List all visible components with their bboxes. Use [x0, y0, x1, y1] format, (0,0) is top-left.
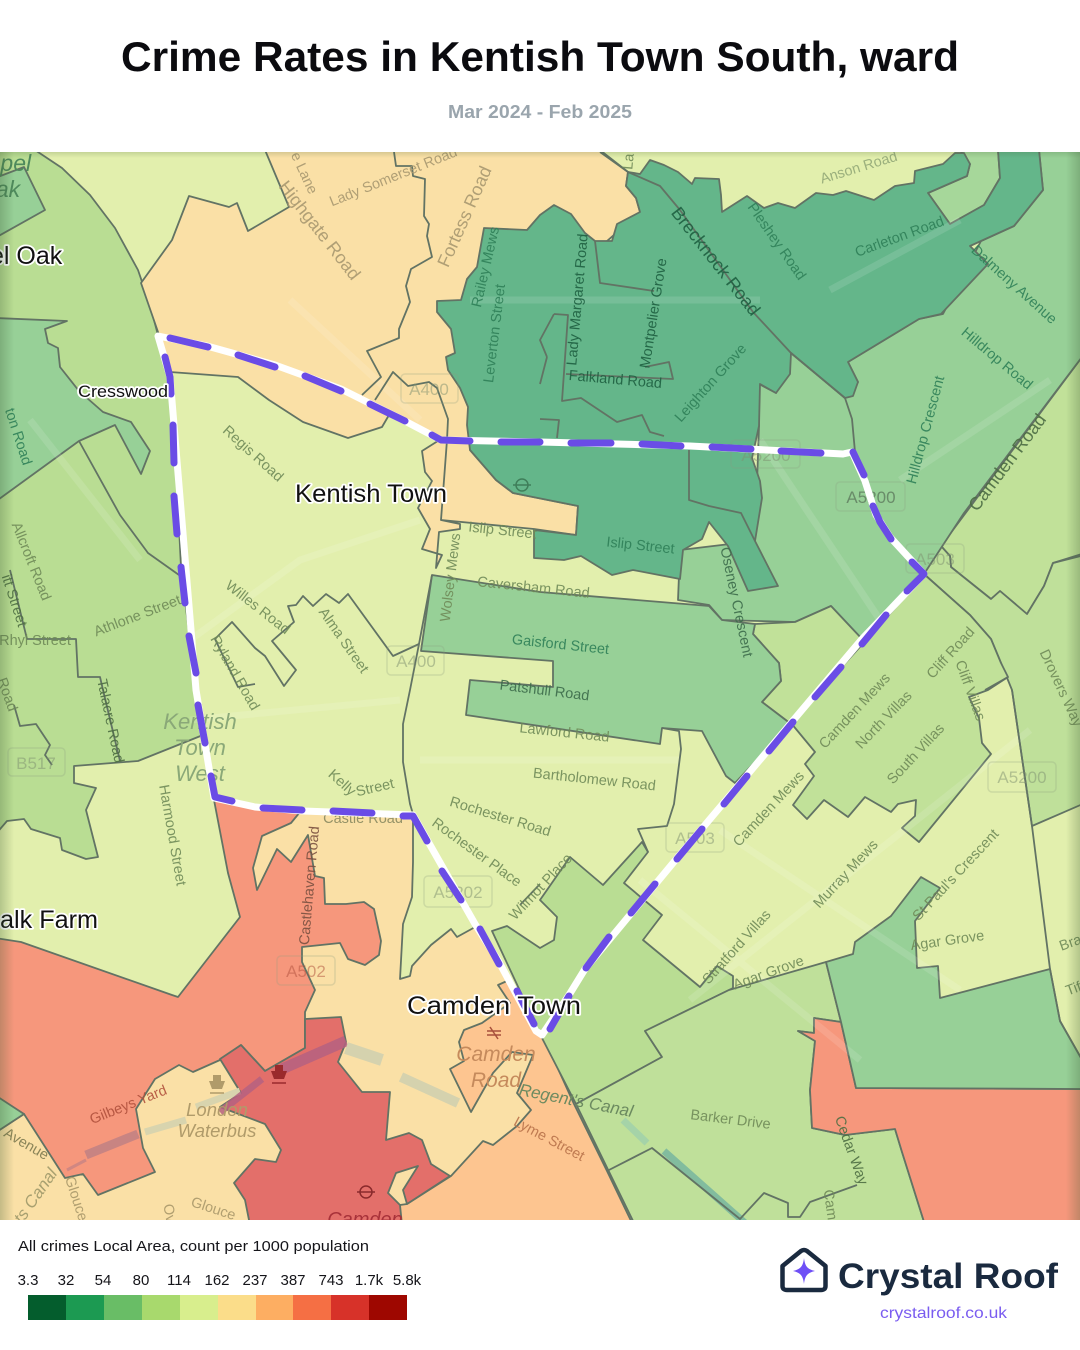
road labels: Rochester Place — [429, 815, 524, 891]
road labels: Talacre Road — [93, 678, 127, 765]
road labels: Oseney Crescent — [716, 546, 755, 659]
map place labels: alk Farm — [0, 906, 98, 934]
road labels: Fortess Road — [433, 163, 496, 270]
road shields: A5200 — [997, 768, 1047, 787]
road labels: Lady Somerset Road — [327, 144, 460, 210]
road labels: Lawford Road — [519, 720, 610, 746]
area: Camden Town red — [220, 1017, 450, 1225]
road shields: A502 — [286, 962, 326, 981]
road labels: Agar Grove — [910, 928, 985, 954]
road labels: Alma Street — [315, 605, 372, 676]
legend values: 237 — [242, 1272, 268, 1289]
faint road network — [30, 220, 1050, 1060]
road shields: A5202 — [433, 883, 483, 902]
area: small west green — [0, 1095, 24, 1133]
legend values: 54 — [95, 1272, 111, 1289]
boundary lines — [10, 152, 1080, 1219]
road shields: A503 — [675, 829, 715, 848]
map place labels — [0, 242, 581, 1020]
road labels: Caversham Road — [476, 574, 590, 602]
italic place labels: West — [175, 761, 226, 786]
road labels: Lyme Street — [511, 1114, 587, 1165]
area: top-left green patch — [0, 167, 45, 238]
road labels: Kelly — [325, 767, 359, 800]
area: east pale-green — [941, 353, 1080, 614]
road labels: Rhyl Street — [0, 633, 71, 649]
ward boundary: white outline — [158, 336, 924, 1035]
logo: Crystal Roof — [782, 1250, 1058, 1322]
road labels: Athlone Street — [92, 592, 183, 640]
road labels: South Villas — [884, 721, 948, 788]
road labels: Cliff Villas — [951, 658, 988, 723]
road labels: ton Road — [1, 406, 35, 467]
area: east salmon — [798, 1018, 1080, 1225]
road labels: Patshull Road — [499, 678, 590, 704]
italic place labels: Waterbus — [178, 1120, 256, 1141]
road labels: Montpelier Grove — [637, 257, 671, 370]
road labels: Barker Drive — [690, 1107, 771, 1133]
area: far-east mid green — [924, 546, 1080, 826]
road labels: Wolsey Mews — [438, 532, 464, 623]
legend values: 80 — [133, 1272, 149, 1289]
area: Gaisford green — [421, 575, 791, 783]
subtitle: date range: Mar 2024 - Feb 2025 — [448, 101, 632, 122]
road shields — [8, 374, 1056, 985]
road labels: Islip Street — [468, 519, 537, 543]
road labels: Cedar Way — [831, 1114, 871, 1188]
road labels: Islip Street — [606, 534, 675, 558]
road labels: Gilbeys Yard — [88, 1083, 169, 1128]
road labels: Murray Mews — [811, 837, 882, 912]
station and ferry icons — [209, 479, 531, 1198]
icon: house with star — [782, 1250, 826, 1290]
area: Camden Town green wedge — [492, 842, 733, 1104]
area: west mid green — [0, 150, 203, 859]
legend values: 32 — [58, 1272, 74, 1289]
road shields: A400 — [409, 380, 449, 399]
map edge shading — [0, 152, 1080, 1220]
wordmark: Crystal Roof — [838, 1257, 1058, 1296]
road labels: Street — [354, 776, 396, 800]
road labels: St Paul's Crescent — [910, 826, 1002, 924]
legend colour scale — [28, 1295, 407, 1320]
road labels: Anson Road — [818, 149, 899, 187]
area: north cream — [141, 150, 640, 568]
road labels: Rochester Road — [448, 794, 553, 840]
area: Brecknock dark green — [437, 150, 1043, 591]
legend values: 743 — [318, 1272, 344, 1289]
road labels: Hilldrop Crescent — [904, 374, 948, 486]
road labels: Gaisford Street — [511, 632, 610, 658]
italic place labels: Kentish — [163, 709, 237, 734]
legend values: 1.7k — [355, 1272, 384, 1289]
road labels: Cliff Road — [924, 624, 978, 682]
road labels: Ov — [159, 1203, 179, 1225]
legend values: 114 — [167, 1272, 191, 1289]
italic place labels: Road — [471, 1069, 522, 1092]
italic place labels: ts Canal — [10, 1164, 62, 1227]
italic place labels: Town — [174, 735, 226, 760]
road labels: Falkland Road — [568, 368, 663, 392]
road labels: La — [620, 152, 638, 170]
area: Cliff Road mid green — [791, 575, 1008, 842]
road shields: A503 — [915, 550, 955, 569]
road shields: B517 — [16, 754, 56, 773]
road labels: Pleshey Road — [744, 200, 809, 283]
map place labels: Kentish Town — [295, 480, 447, 508]
road labels: Brecknock Road — [667, 203, 764, 320]
road labels: Glouce — [189, 1194, 238, 1224]
title: Crime Rates in Kentish Town South, ward — [121, 33, 959, 80]
legend values: 387 — [280, 1272, 306, 1289]
legend — [18, 1238, 422, 1320]
italic place labels: Regent's Canal — [517, 1080, 636, 1121]
area: Barker Drive green — [576, 962, 925, 1225]
area: west green patch — [0, 318, 150, 502]
legend values: 3.3 — [18, 1272, 38, 1289]
map place labels: Camden Town — [407, 992, 581, 1020]
road labels: Camden Mews — [730, 768, 808, 850]
area: north-east pocket — [928, 150, 1000, 224]
road labels: Dalmeny Avenue — [968, 242, 1060, 328]
road labels: Caml — [820, 1189, 840, 1224]
road labels: Wilmot Place — [506, 851, 576, 924]
road labels: e Lane — [287, 150, 320, 197]
area: south cream — [0, 814, 532, 1220]
road labels: Agar Grove — [731, 953, 806, 993]
italic place labels: Camden — [327, 1209, 403, 1231]
road labels: North Villas — [853, 688, 916, 752]
ward boundary: purple dashes — [165, 338, 924, 1029]
legend values — [18, 1272, 422, 1289]
road labels: Railey Mews — [469, 225, 503, 309]
road labels: Carleton Road — [853, 214, 946, 261]
road labels: Leighton Grove — [672, 341, 750, 426]
road labels: Castlehaven Road — [297, 826, 323, 946]
italic place labels: Camden — [456, 1043, 536, 1066]
legend values: 162 — [204, 1272, 230, 1289]
road labels: Stratford Villas — [700, 907, 774, 988]
road labels: Bartholomew Road — [532, 766, 657, 794]
italic place labels: London — [186, 1099, 248, 1120]
road labels: Harmood Street — [155, 784, 189, 887]
road labels: Willes Road — [222, 578, 293, 638]
road labels: Highgate Road — [275, 177, 365, 284]
road labels: Avenue — [1, 1125, 51, 1164]
area: Leighton green east — [678, 150, 1080, 639]
road labels: Camden Road — [964, 410, 1050, 515]
road labels: Lady Margaret Road — [564, 233, 592, 366]
road labels: Hilldrop Road — [958, 325, 1035, 393]
italic place labels — [0, 150, 636, 1231]
road labels: Camden Mews — [816, 670, 894, 752]
canal strips — [67, 1041, 753, 1230]
road shields: A5200 — [846, 488, 896, 507]
road labels: Ryland Road — [207, 633, 262, 713]
website: crystalroof.co.uk — [880, 1305, 1008, 1322]
legend title: All crimes Local Area, count per 1000 population — [18, 1238, 369, 1255]
area: small wedge — [753, 606, 862, 724]
area: Camden west salmon — [0, 800, 381, 1195]
legend values: 5.8k — [393, 1272, 422, 1289]
road labels: Castle Road — [323, 811, 403, 827]
road shields: A5200 — [741, 446, 791, 465]
area: Camden Road peach — [400, 981, 633, 1225]
road shields: A400 — [396, 652, 436, 671]
map place labels: Cresswood — [78, 382, 168, 401]
road labels: Glouce — [61, 1174, 91, 1223]
road labels: Leverton Street — [481, 283, 509, 384]
area: Agar Grove green — [826, 877, 1080, 1089]
road labels: Allcroft Road — [8, 520, 54, 603]
road labels: Regis Road — [219, 423, 286, 485]
